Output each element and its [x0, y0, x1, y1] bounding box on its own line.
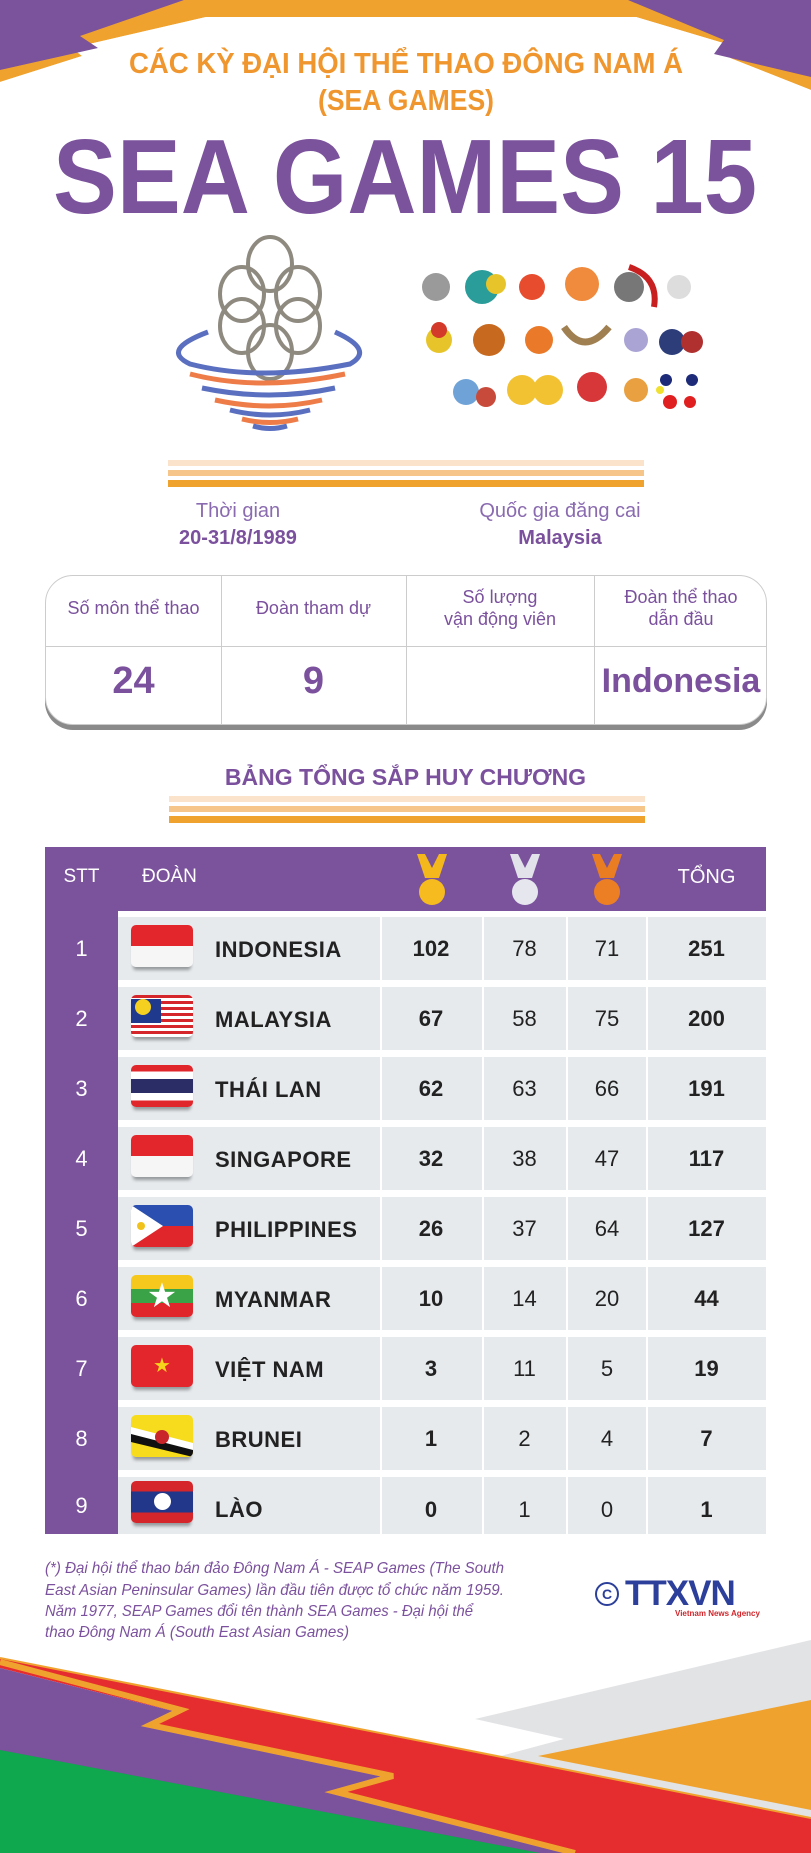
info: host country: Quốc gia đăng cai: [479, 500, 641, 522]
row 2 Malaysia: [75, 987, 766, 1050]
row 3 Thailand: 191: [688, 1076, 725, 1101]
title: subtitle: [129, 46, 683, 117]
row 6 Myanmar: 10: [419, 1286, 443, 1311]
row 7 Vietnam: 19: [694, 1356, 719, 1381]
row 7 Vietnam: 3: [425, 1356, 437, 1381]
footnote: thao Đông Nam Á (South East Asian Games): [45, 1622, 349, 1641]
row 5 Philippines: 64: [595, 1216, 619, 1241]
row 1 Indonesia: 1: [75, 936, 88, 961]
row 9 Laos: 0: [425, 1497, 437, 1522]
header: ĐOÀN: ĐOÀN: [142, 866, 197, 887]
top banner decoration: [0, 0, 811, 90]
row 1 Indonesia: INDONESIA: [215, 937, 342, 962]
header: leading team: [624, 587, 738, 629]
row 3 Thailand: [75, 1057, 766, 1120]
row 6 Myanmar: 20: [595, 1286, 619, 1311]
icon: bronze medal: [592, 854, 622, 905]
info: host country: Malaysia: [518, 527, 602, 549]
row 1 Indonesia: 71: [595, 936, 619, 961]
title: subtitle: CÁC KỲ ĐẠI HỘI THỂ THAO ĐÔNG NAM Á: [129, 46, 683, 80]
footnote: [45, 1558, 504, 1641]
header: leading team: Đoàn thể thao: [624, 587, 738, 607]
header: athletes: [444, 587, 556, 629]
row 5 Philippines: [75, 1197, 766, 1260]
row 2 Malaysia: 200: [688, 1006, 725, 1031]
row 4 Singapore: 4: [75, 1146, 88, 1171]
decorative stripes 2: [169, 796, 645, 823]
header: delegations: Đoàn tham dự: [256, 598, 371, 618]
value: 24: 24: [112, 660, 155, 702]
row 6 Myanmar: ★: [147, 1277, 177, 1315]
row 9 Laos: [75, 1477, 766, 1534]
title: subtitle: (SEA GAMES): [318, 85, 494, 117]
row 2 Malaysia: MALAYSIA: [215, 1007, 332, 1032]
row 6 Myanmar: MYANMAR: [215, 1287, 331, 1312]
header: TỔNG: TỔNG: [678, 866, 735, 888]
row 1 Indonesia: [75, 917, 766, 980]
row 8 Brunei: BRUNEI: [215, 1427, 302, 1452]
row 7 Vietnam: 7: [75, 1356, 88, 1381]
row 5 Philippines: 127: [688, 1216, 725, 1241]
icon: silver medal: [510, 854, 540, 905]
info: time: 20-31/8/1989: [179, 527, 297, 549]
row 5 Philippines: 26: [419, 1216, 443, 1241]
row 3 Thailand: 66: [595, 1076, 619, 1101]
row 7 Vietnam: 11: [513, 1356, 536, 1381]
header: STT: STT: [64, 866, 99, 887]
row 1 Indonesia: 251: [688, 936, 725, 961]
icon: SEA Games logo: [176, 235, 362, 431]
info: time: [179, 500, 297, 549]
row 6 Myanmar: 44: [694, 1286, 719, 1311]
row 9 Laos: 0: [601, 1497, 613, 1522]
row 3 Thailand: 63: [512, 1076, 537, 1101]
header: leading team: dẫn đầu: [648, 609, 714, 629]
mascots collage: [422, 264, 703, 409]
icon: gold medal: [417, 854, 447, 905]
row 2 Malaysia: 67: [419, 1006, 443, 1031]
row 4 Singapore: 47: [595, 1146, 619, 1171]
row 4 Singapore: [75, 1127, 766, 1190]
row 9 Laos: 1: [700, 1497, 713, 1522]
row 8 Brunei: 2: [518, 1426, 531, 1451]
row 7 Vietnam: 5: [601, 1356, 613, 1381]
header: athletes: Số lượng: [463, 587, 537, 607]
row 6 Myanmar: 14: [512, 1286, 537, 1311]
info: host country: [479, 500, 641, 549]
row 4 Singapore: 117: [689, 1146, 724, 1171]
row 7 Vietnam: VIỆT NAM: [215, 1357, 324, 1382]
row 2 Malaysia: 75: [595, 1006, 619, 1031]
header: athletes: vận động viên: [444, 609, 556, 629]
row 3 Thailand: THÁI LAN: [215, 1077, 322, 1102]
row 5 Philippines: 37: [512, 1216, 537, 1241]
panel: summary table: [45, 575, 767, 725]
logo: TTXVN: [595, 1574, 760, 1618]
row 6 Myanmar: [75, 1267, 766, 1330]
row 4 Singapore: SINGAPORE: [215, 1147, 352, 1172]
row 7 Vietnam: ★: [153, 1355, 171, 1377]
row 5 Philippines: 5: [75, 1216, 88, 1241]
heading: medal table: BẢNG TỔNG SẮP HUY CHƯƠNG: [225, 764, 586, 790]
row 5 Philippines: PHILIPPINES: [215, 1217, 357, 1242]
row 8 Brunei: 7: [700, 1426, 713, 1451]
row 1 Indonesia: 78: [512, 936, 537, 961]
row 3 Thailand: 62: [419, 1076, 443, 1101]
header: sports count: Số môn thể thao: [67, 598, 200, 618]
bottom decoration: [0, 1640, 811, 1853]
row 3 Thailand: 3: [75, 1076, 88, 1101]
row 4 Singapore: 38: [512, 1146, 537, 1171]
row 6 Myanmar: 6: [75, 1286, 88, 1311]
row 4 Singapore: 32: [419, 1146, 443, 1171]
footnote: Năm 1977, SEAP Games đổi tên thành SEA Games - Đại hội thể: [45, 1602, 474, 1620]
row 9 Laos: 9: [75, 1493, 88, 1518]
row 2 Malaysia: 2: [75, 1006, 88, 1031]
row 1 Indonesia: 102: [413, 936, 449, 961]
row 8 Brunei: [75, 1407, 766, 1470]
value: Indonesia: Indonesia: [602, 662, 760, 700]
row 7 Vietnam: [75, 1337, 766, 1400]
logo: TTXVN: Vietnam News Agency: [675, 1609, 760, 1618]
row 8 Brunei: 1: [425, 1426, 437, 1451]
info: time: Thời gian: [196, 500, 280, 522]
row 9 Laos: LÀO: [215, 1497, 263, 1522]
row 2 Malaysia: 58: [512, 1006, 537, 1031]
value: 9: 9: [303, 660, 324, 702]
row 8 Brunei: 4: [601, 1426, 613, 1451]
footnote: East Asian Peninsular Games) lần đầu tiên được tổ chức năm 1959.: [45, 1581, 504, 1599]
row 9 Laos: 1: [518, 1497, 531, 1522]
logo: TTXVN: TTXVN: [625, 1574, 735, 1613]
row 8 Brunei: 8: [75, 1426, 88, 1451]
decorative stripes 1: [168, 460, 644, 487]
logo: TTXVN: C: [602, 1586, 612, 1602]
